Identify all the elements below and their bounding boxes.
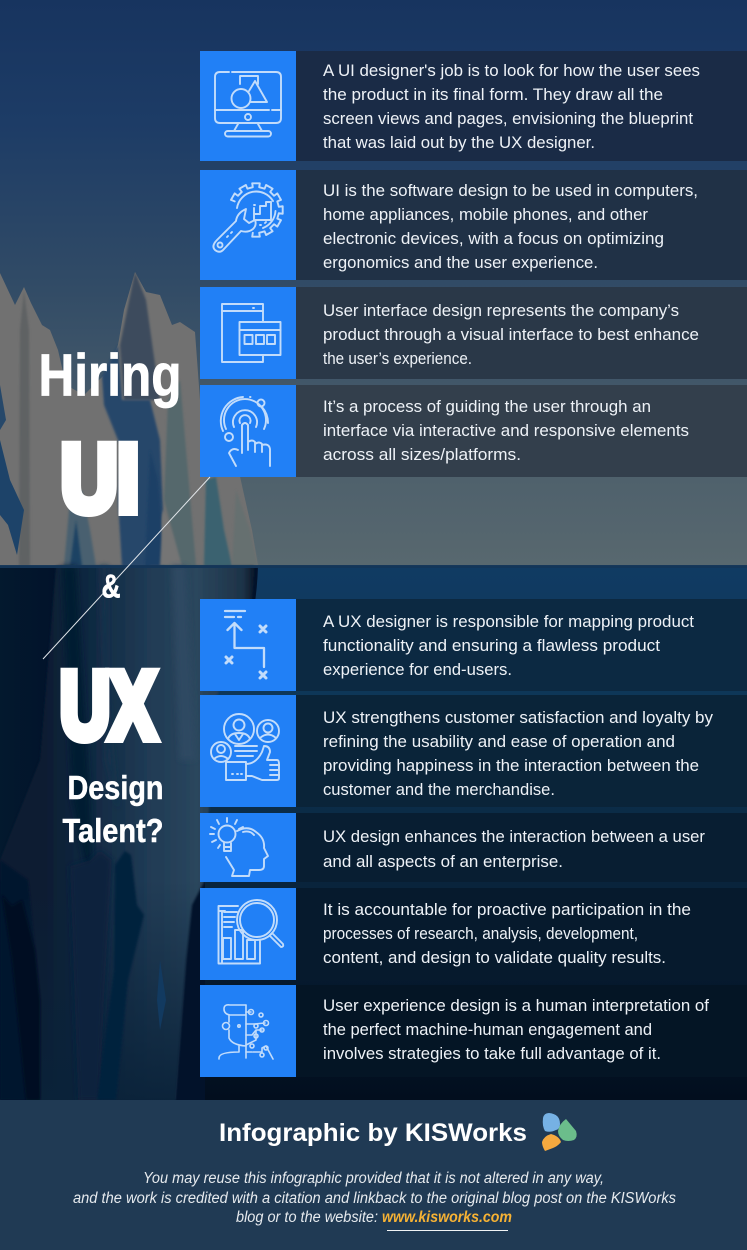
- panel 3: [200, 287, 747, 379]
- text 6: customer and the merchandise.: [323, 781, 555, 799]
- text 5: A UX designer is responsible for mapping product: [323, 613, 694, 631]
- title: Hiring: [38, 342, 182, 408]
- text 1: the product in its final form. They draw all the: [323, 86, 663, 104]
- text 8: processes of research, analysis, development,: [323, 925, 638, 943]
- text 2: home appliances, mobile phones, and other: [323, 206, 649, 224]
- text 5: experience for end-users.: [323, 661, 512, 679]
- text 1: screen views and pages, envisioning the blueprint: [323, 110, 693, 128]
- background: sky: [0, 0, 747, 566]
- text 4: interface via interactive and responsive elements: [323, 422, 689, 440]
- panel 9: [200, 985, 747, 1077]
- text 5: functionality and ensuring a flawless product: [323, 637, 660, 655]
- title: UX: [60, 653, 156, 759]
- text 8: It is accountable for proactive participation in the: [323, 901, 691, 919]
- panel 1: [200, 51, 747, 161]
- text 2: UI is the software design to be used in computers,: [323, 182, 698, 200]
- text 1: that was laid out by the UX designer.: [323, 134, 595, 152]
- icon: customer satisfaction: [211, 714, 279, 780]
- icon: human-machine head: [219, 1005, 273, 1059]
- iceberg under water: [0, 566, 258, 1100]
- icon: head with lightbulb: [210, 818, 268, 876]
- icon: interface windows: [222, 304, 280, 362]
- panel 6: [200, 695, 747, 807]
- footer heading: Infographic by KISWorks: [219, 1119, 527, 1147]
- title: [38, 342, 182, 850]
- text 6: refining the usability and ease of operation and: [323, 733, 675, 751]
- footer note: [73, 1170, 676, 1226]
- background: sea: [0, 566, 747, 1100]
- text 2: electronic devices, with a focus on optimizing: [323, 230, 664, 248]
- text 7: UX design enhances the interaction between a user: [323, 828, 706, 846]
- text 4: [323, 398, 689, 464]
- text 9: [323, 997, 709, 1063]
- text 3: product through a visual interface to best enhance: [323, 326, 699, 344]
- text 2: ergonomics and the user experience.: [323, 254, 598, 272]
- footer: [0, 1100, 747, 1250]
- title: UI: [61, 426, 139, 532]
- tile 8: [200, 888, 296, 980]
- icon: monitor with shapes: [215, 72, 281, 136]
- panel 4: [200, 385, 747, 477]
- text 2: [323, 182, 698, 272]
- text 3: User interface design represents the company’s: [323, 302, 679, 320]
- connector line: [43, 477, 210, 659]
- icon: gear and wrench: [213, 183, 283, 252]
- icon: user flow path: [225, 611, 266, 678]
- panel 2: [200, 170, 747, 280]
- text 6: [323, 709, 714, 799]
- icon: KISWorks logo: [542, 1113, 577, 1151]
- waterline: [0, 565, 747, 568]
- tile 1: [200, 51, 296, 161]
- panel 5: [200, 599, 747, 691]
- icon: research magnifier: [218, 900, 283, 964]
- tile 7: [200, 813, 296, 882]
- panel 7: [200, 813, 747, 882]
- footer underline: [387, 1230, 508, 1231]
- footer note: blog or to the website:: [236, 1209, 378, 1226]
- icon: touch gesture: [221, 397, 270, 466]
- panel 8: [200, 888, 747, 980]
- text 8: content, and design to validate quality results.: [323, 949, 666, 967]
- title: &: [102, 568, 120, 604]
- text 3: the user’s experience.: [323, 350, 472, 368]
- footer note: and the work is credited with a citation and linkback to the original blog post on the KISWorks: [73, 1190, 676, 1207]
- text 7: [323, 828, 706, 871]
- text 9: involves strategies to take full advantage of it.: [323, 1045, 661, 1063]
- text 1: A UI designer's job is to look for how the user sees: [323, 62, 700, 80]
- tile 4: [200, 385, 296, 477]
- title: Design: [68, 770, 164, 807]
- text 3: [323, 302, 699, 368]
- tile 5: [200, 599, 296, 691]
- footer note: You may reuse this infographic provided that it is not altered in any way,: [143, 1170, 604, 1187]
- title: Talent?: [62, 813, 164, 850]
- text 4: It’s a process of guiding the user through an: [323, 398, 651, 416]
- text 4: across all sizes/platforms.: [323, 446, 521, 464]
- text 5: [323, 613, 694, 679]
- text 6: providing happiness in the interaction between the: [323, 757, 699, 775]
- tile 2: [200, 170, 296, 280]
- iceberg above water: [0, 272, 258, 566]
- footer note: www.kisworks.com: [382, 1209, 512, 1226]
- text 6: UX strengthens customer satisfaction and loyalty by: [323, 709, 714, 727]
- text 9: User experience design is a human interpretation of: [323, 997, 709, 1015]
- text 9: the perfect machine-human engagement and: [323, 1021, 652, 1039]
- tile 3: [200, 287, 296, 379]
- text 7: and all aspects of an enterprise.: [323, 853, 563, 871]
- tile 6: [200, 695, 296, 807]
- tile 9: [200, 985, 296, 1077]
- text 1: [323, 62, 700, 152]
- text 8: [323, 901, 691, 967]
